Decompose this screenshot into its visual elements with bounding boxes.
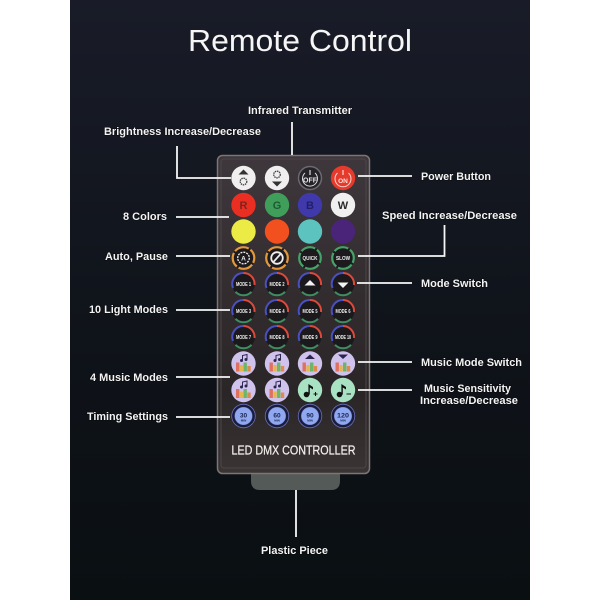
row: timing: 90 bbox=[306, 412, 314, 420]
row: brightness and power bbox=[231, 166, 355, 190]
row: timing: MIN bbox=[274, 418, 280, 422]
callout: auto, pause: Auto, Pause bbox=[105, 251, 168, 263]
row: timing: 120 bbox=[337, 412, 349, 420]
row: timing: MIN bbox=[307, 418, 313, 422]
callout: 10 light modes: 10 Light Modes bbox=[89, 304, 168, 316]
row: RGBW colors: R bbox=[240, 200, 248, 212]
callout: auto, pause bbox=[105, 251, 230, 263]
callout: music mode switch: Music Mode Switch bbox=[421, 357, 522, 369]
callout: power button: Power Button bbox=[421, 171, 491, 183]
row: modes 7 to 10 bbox=[232, 326, 354, 348]
callout: music sensitivity bbox=[358, 383, 518, 407]
row: modes 7 to 10: MODE 9 bbox=[302, 335, 318, 341]
callout: mode switch bbox=[357, 278, 488, 290]
callout: timing settings: Timing Settings bbox=[87, 411, 168, 423]
callout: 4 music modes: 4 Music Modes bbox=[90, 372, 168, 384]
callout: power button bbox=[358, 171, 491, 183]
row: RGBW colors: B bbox=[306, 200, 314, 212]
row: auto, pause, quick, slow bbox=[232, 246, 354, 270]
callout: 8 colors: 8 Colors bbox=[123, 211, 167, 223]
row: RGBW colors: G bbox=[273, 200, 281, 212]
callout: music sensitivity: Music Sensitivity bbox=[424, 383, 512, 395]
callout: plastic piece: Plastic Piece bbox=[261, 545, 328, 557]
row: modes 3 to 6: MODE 4 bbox=[269, 309, 285, 315]
row: timing: 60 bbox=[273, 412, 281, 420]
row: mode 1, 2, arrows: MODE 1 bbox=[236, 282, 251, 288]
row: modes 3 to 6: MODE 3 bbox=[236, 309, 251, 315]
callout: music sensitivity: Increase/Decrease bbox=[420, 395, 518, 407]
row: brightness and power: OFF bbox=[303, 178, 318, 184]
row: brightness and power: ON bbox=[338, 178, 348, 185]
plastic piece bbox=[251, 470, 340, 490]
callout: 8 colors bbox=[123, 211, 229, 223]
callout: infrared transmitter: Infrared Transmitter bbox=[248, 105, 353, 117]
callout: mode switch: Mode Switch bbox=[421, 278, 488, 290]
row: timing: MIN bbox=[241, 418, 246, 422]
row: mode 1, 2, arrows bbox=[232, 272, 354, 296]
row: music modes and sensitivity bbox=[231, 378, 355, 402]
row: RGBW colors bbox=[231, 193, 355, 217]
row: modes 3 to 6: MODE 5 bbox=[302, 309, 318, 315]
row: mode 1, 2, arrows: MODE 2 bbox=[269, 282, 285, 288]
remote body bbox=[218, 156, 370, 474]
row: modes 3 to 6: MODE 6 bbox=[335, 309, 351, 315]
callout: 4 music modes bbox=[90, 372, 230, 384]
callout: plastic piece bbox=[261, 490, 328, 557]
row: auto, pause, quick, slow: SLOW bbox=[336, 256, 351, 262]
dark background panel bbox=[70, 0, 530, 600]
callout: infrared transmitter bbox=[248, 105, 353, 155]
row: auto, pause, quick, slow: A bbox=[241, 256, 246, 262]
row: timing: MIN bbox=[340, 418, 346, 422]
callout: speed: Speed Increase/Decrease bbox=[382, 210, 517, 222]
row: modes 3 to 6 bbox=[232, 300, 354, 322]
callout: brightness bbox=[104, 126, 261, 178]
callout: brightness: Brightness Increase/Decrease bbox=[104, 126, 261, 138]
row: timing bbox=[231, 404, 355, 428]
row: more colors bbox=[231, 219, 355, 244]
callout: speed bbox=[358, 210, 517, 256]
row: modes 7 to 10: MODE 10 bbox=[335, 335, 351, 341]
row: modes 7 to 10: MODE 7 bbox=[236, 335, 251, 341]
row: modes 7 to 10: MODE 8 bbox=[269, 335, 285, 341]
row: timing: 30 bbox=[240, 412, 247, 420]
row: RGBW colors: W bbox=[338, 200, 349, 212]
row: music modes bbox=[231, 351, 355, 376]
title: Remote Control bbox=[188, 23, 412, 58]
remote label: LED DMX CONTROLLER bbox=[232, 444, 356, 458]
row: auto, pause, quick, slow: QUICK bbox=[303, 256, 318, 262]
